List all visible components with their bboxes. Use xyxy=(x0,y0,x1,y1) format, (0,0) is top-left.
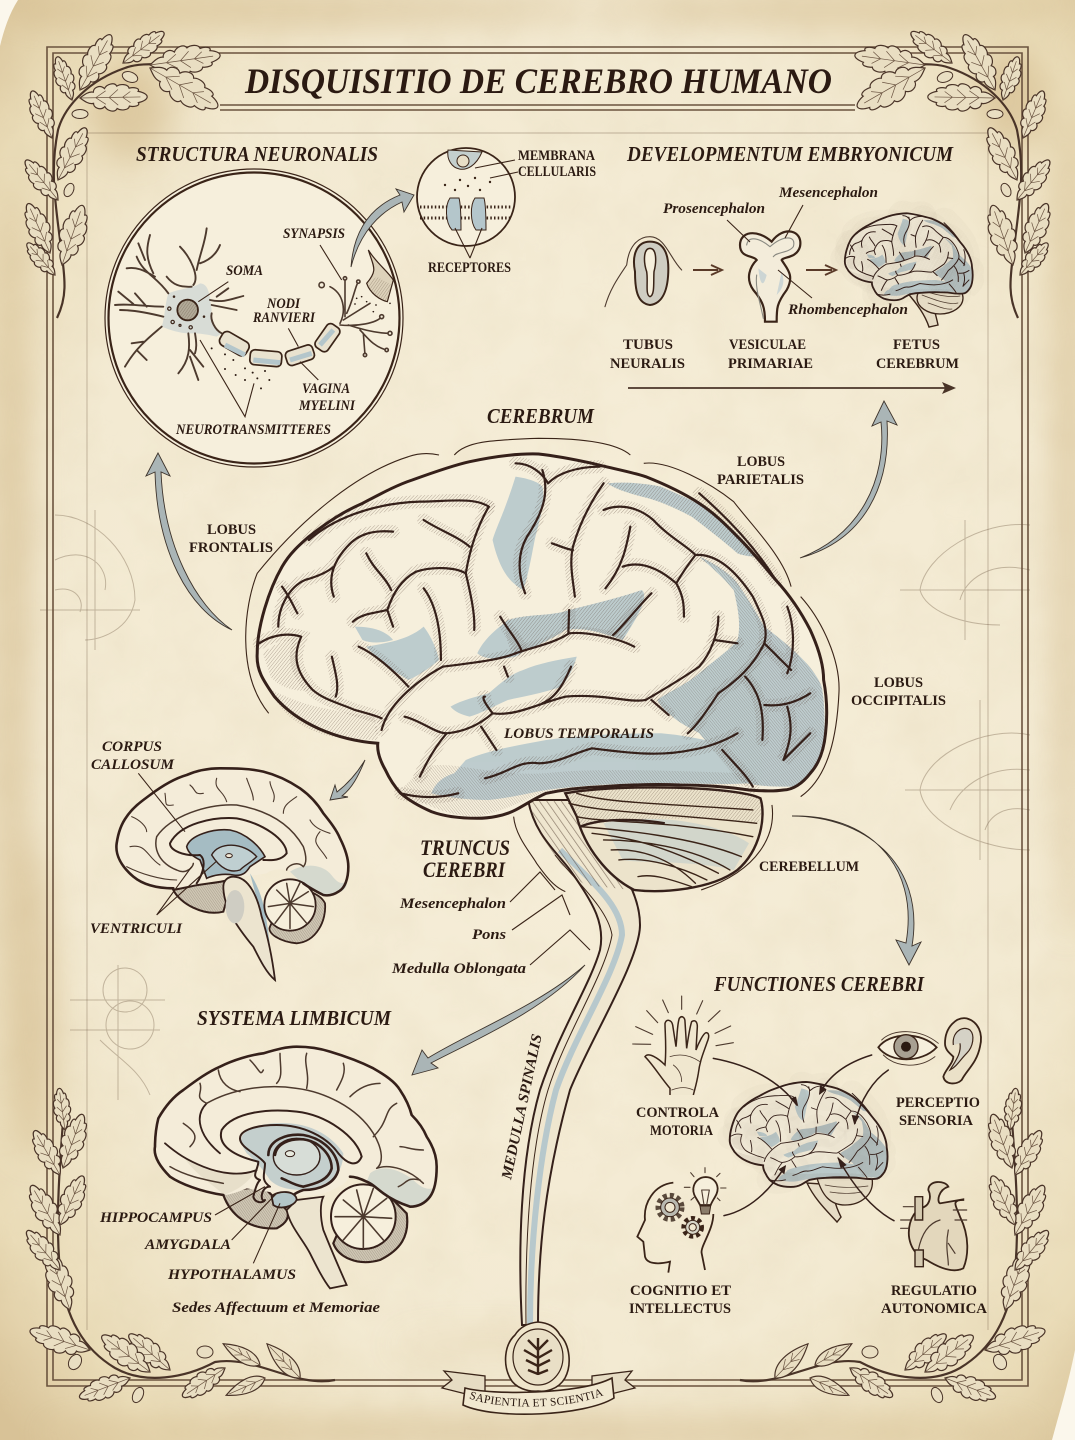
panel: functiones cerebri: SENSORIA xyxy=(899,1113,973,1129)
panel: structura neuronalis: SOMA xyxy=(226,263,263,279)
panel: structura neuronalis: NEUROTRANSMITTERES xyxy=(175,422,331,438)
labels: stages: FETUS xyxy=(893,337,940,353)
oak leaf corner: top left xyxy=(18,24,225,318)
panel: structura neuronalis: VAGINA xyxy=(302,381,350,397)
panel: developmentum embryonicum xyxy=(605,142,973,394)
panel: structura neuronalis xyxy=(105,142,403,467)
arrow: parietal to development xyxy=(800,401,897,558)
labels: stages: VESICULAE xyxy=(729,337,806,353)
panel: systema limbicum: SYSTEMA LIMBICUM xyxy=(197,1006,392,1030)
labels: vesicles: Prosencephalon xyxy=(663,201,765,217)
label: membrana cellularis: CELLULARIS xyxy=(518,164,596,180)
panel: functiones cerebri: PERCEPTIO xyxy=(896,1095,980,1111)
labels: vesicles xyxy=(663,185,908,318)
panel: truncus cerebri labels: Pons xyxy=(472,927,506,943)
icon: light bulb xyxy=(684,1168,726,1214)
label: lobus parietalis: LOBUS xyxy=(737,454,785,470)
panel: truncus cerebri labels: Medulla Oblongata xyxy=(391,961,527,977)
labels: stages: CEREBRUM xyxy=(876,356,959,372)
labels: stages: TUBUS xyxy=(623,337,673,353)
label: lobus occipitalis: OCCIPITALIS xyxy=(851,693,946,709)
panel: membrana cellularis xyxy=(417,148,518,258)
icon: ear xyxy=(943,1018,981,1083)
panel: systema limbicum: Sedes Affectuum et Memoriae xyxy=(172,1300,380,1316)
panel: developmentum embryonicum: DEVELOPMENTUM EMBRYONICUM xyxy=(626,142,954,166)
arrows to brain xyxy=(713,1055,894,1221)
label: lobus occipitalis: LOBUS xyxy=(874,675,923,691)
arrow: dev 1 xyxy=(693,265,722,275)
central function brain xyxy=(730,1082,888,1222)
panel: systema limbicum: HIPPOCAMPUS xyxy=(99,1210,212,1226)
lobe brackets xyxy=(246,438,839,892)
panel: functiones cerebri: INTELLECTUS xyxy=(629,1301,731,1317)
panel: systema limbicum xyxy=(99,1006,437,1316)
panel: functiones cerebri: COGNITIO ET xyxy=(630,1283,731,1299)
panel: truncus cerebri labels xyxy=(391,835,590,977)
panel: systema limbicum: HYPOTHALAMUS xyxy=(167,1267,296,1283)
icon: neural tube xyxy=(605,237,682,307)
panel: structura neuronalis: RANVIERI xyxy=(252,310,316,326)
panel: functiones cerebri: REGULATIO xyxy=(891,1283,977,1299)
label: lobus frontalis: LOBUS xyxy=(207,522,256,538)
wax seal and ribbon xyxy=(440,1321,636,1415)
icon: fetal brain xyxy=(845,213,973,327)
labels: stages xyxy=(610,337,959,372)
labels: vesicles: Mesencephalon xyxy=(778,185,878,201)
label: medulla spinalis: MEDULLA SPINALIS xyxy=(499,1033,546,1182)
panel: truncus cerebri labels: TRUNCUS xyxy=(420,835,510,860)
panel: structura neuronalis: NODI xyxy=(266,296,301,312)
title: DISQUISITIO DE CEREBRO HUMANO xyxy=(244,61,832,101)
arrow: dev 2 xyxy=(806,265,836,275)
icon: head with gears xyxy=(637,1183,713,1273)
oak leaf corner: bottom right xyxy=(740,1087,1056,1408)
label: lobus temporalis: LOBUS TEMPORALIS xyxy=(503,726,654,742)
label: lobus parietalis xyxy=(717,454,804,488)
neuron drawing xyxy=(115,228,393,417)
labels: stages: PRIMARIAE xyxy=(728,356,813,372)
oak leaf corner: bottom left xyxy=(19,1087,335,1408)
panel: functiones cerebri: MOTORIA xyxy=(650,1123,713,1139)
panel: functiones cerebri: FUNCTIONES CEREBRI xyxy=(713,972,925,996)
arrow: cerebellum to functions xyxy=(792,816,921,965)
panel: functiones cerebri: CONTROLA xyxy=(636,1105,719,1121)
icon: heart xyxy=(901,1182,967,1270)
panel: corpus callosum sagittal brain: CALLOSUM xyxy=(91,757,175,773)
labels: stages: NEURALIS xyxy=(610,356,685,372)
label: lobus parietalis: PARIETALIS xyxy=(717,472,804,488)
main brain illustration xyxy=(257,454,827,818)
label: lobus frontalis: FRONTALIS xyxy=(189,540,273,556)
panel: structura neuronalis: SYNAPSIS xyxy=(283,226,345,242)
panel: truncus cerebri labels: CEREBRI xyxy=(423,857,506,882)
icon: eye xyxy=(878,1032,938,1065)
arrow: brainstem to limbic xyxy=(412,965,585,1075)
oak leaf corner: top right xyxy=(850,24,1057,318)
panel: corpus callosum sagittal brain: CORPUS xyxy=(102,739,162,755)
label: receptores: RECEPTORES xyxy=(428,260,511,276)
label: lobus frontalis xyxy=(189,522,273,556)
label: cerebellum: CEREBELLUM xyxy=(759,859,859,875)
label: membrana cellularis: MEMBRANA xyxy=(518,148,595,164)
wax seal and ribbon: SAPIENTIA ET SCIENTIA xyxy=(470,1389,604,1407)
arrow: neuron to membrane xyxy=(351,189,414,267)
arrow: timeline xyxy=(628,382,956,394)
arrow: frontal to neuron xyxy=(146,453,232,630)
panel: structura neuronalis: MYELINI xyxy=(298,398,356,414)
faint margin sketches xyxy=(40,510,1030,1100)
arrow: temporal to corpus callosum xyxy=(330,760,365,800)
spinal cord and brainstem xyxy=(520,800,640,1325)
icon: hand xyxy=(633,996,733,1095)
labels: vesicles: Rhombencephalon xyxy=(787,302,908,318)
panel: corpus callosum sagittal brain: VENTRICULI xyxy=(90,921,183,937)
panel: functiones cerebri xyxy=(629,972,987,1317)
cerebellum xyxy=(565,787,763,891)
panel: truncus cerebri labels: Mesencephalon xyxy=(399,896,506,912)
icon: primary vesicles xyxy=(740,231,800,322)
label: cerebrum: CEREBRUM xyxy=(487,404,595,428)
label: lobus occipitalis xyxy=(851,675,946,709)
panel: functiones cerebri: AUTONOMICA xyxy=(881,1301,987,1317)
panel: systema limbicum: AMYGDALA xyxy=(144,1237,231,1253)
panel: structura neuronalis: STRUCTURA NEURONALIS xyxy=(136,142,378,166)
label: membrana cellularis xyxy=(518,148,596,180)
panel: corpus callosum sagittal brain xyxy=(90,739,348,980)
